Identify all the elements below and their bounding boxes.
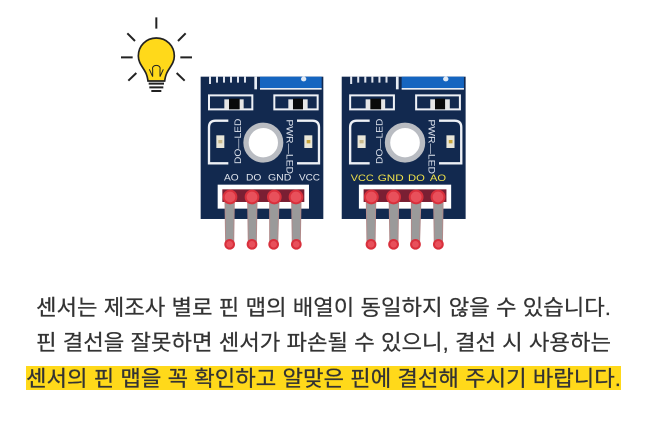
- sensor module: alternate pin order: [342, 77, 466, 249]
- pin labels: VCC GND DO AO: VCC: [351, 173, 374, 183]
- pin labels: VCC GND DO AO: [351, 173, 446, 183]
- text: notice line 2: 핀 결선을 잘못하면 센서가 파손될 수 있으니, 결선 시 사용하는: [36, 331, 611, 355]
- pin labels: VCC GND DO AO: DO: [408, 173, 425, 183]
- pin labels: AO DO GND VCC: AO: [224, 173, 239, 183]
- pin labels: AO DO GND VCC: DO: [246, 173, 261, 183]
- pin labels: VCC GND DO AO: AO: [430, 173, 446, 183]
- highlighted warning: 센서의 핀 맵을 꼭 확인하고 알맞은 핀에 결선해 주시기 바랍니다.: [26, 367, 621, 391]
- bulb glass: [138, 38, 174, 81]
- icon: light bulb: [121, 17, 192, 91]
- bulb base: [149, 84, 164, 91]
- pin labels: AO DO GND VCC: GND: [268, 173, 292, 183]
- icon: light rays: [121, 17, 192, 81]
- sensor module: original pin order: [201, 77, 323, 249]
- bulb filament: [149, 65, 163, 77]
- pin labels: VCC GND DO AO: GND: [378, 173, 404, 183]
- pin labels: AO DO GND VCC: [224, 173, 320, 183]
- pin labels: AO DO GND VCC: VCC: [299, 173, 320, 183]
- text: notice line 1: 센서는 제조사 별로 핀 맵의 배열이 동일하지 않을 수 있습니다.: [36, 296, 611, 320]
